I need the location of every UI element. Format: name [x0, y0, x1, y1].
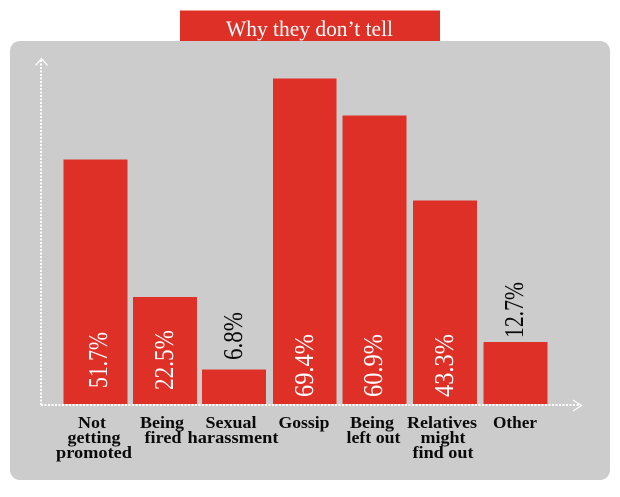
bar: Gossip: [273, 78, 336, 404]
axis: vertical arrow: [36, 58, 48, 405]
bar: Not getting promoted: 51.7%: [83, 332, 113, 388]
bar chart: [36, 58, 582, 411]
label: Relatives might find out: Relatives: [407, 413, 477, 432]
title: [180, 10, 440, 41]
label: Relatives might find out: might: [420, 428, 466, 447]
label: Relatives might find out: find out: [412, 443, 474, 462]
label: Being left out: left out: [346, 428, 401, 447]
bar: Relatives might find out: 43.3%: [429, 334, 459, 397]
label: Gossip: Gossip: [278, 413, 330, 432]
label: Being fired: Being: [140, 413, 185, 432]
label: Not getting promoted: promoted: [56, 443, 133, 462]
axis: horizontal arrow: [41, 400, 582, 411]
label: Other: Other: [493, 413, 537, 432]
bar: Other: [484, 282, 548, 404]
label: Not getting promoted: Not: [78, 413, 106, 432]
label: Sexual harassment: harassment: [188, 428, 279, 447]
bar: Other: 12.7%: [499, 282, 529, 338]
bar: Not getting promoted: [64, 160, 128, 404]
label: Not getting promoted: getting: [68, 428, 121, 447]
bar: Relatives might find out: [413, 200, 477, 404]
label: Being fired: fired: [144, 428, 182, 447]
label: Being left out: [346, 413, 401, 447]
bar: Being left out: 60.9%: [358, 334, 388, 397]
label: Relatives might find out: [407, 413, 477, 462]
label: Being left out: Being: [350, 413, 395, 432]
label: Sexual harassment: [188, 413, 279, 447]
label: Sexual harassment: Sexual: [206, 413, 257, 432]
bar: Being left out: [342, 116, 406, 404]
bar: Sexual harassment: [202, 312, 266, 404]
label: Not getting promoted: [56, 413, 133, 462]
bar: Sexual harassment: 6.8%: [218, 312, 248, 360]
title: Why they don’t tell: [226, 16, 393, 41]
bar: Being fired: 22.5%: [149, 330, 179, 390]
bar: Being fired: [133, 297, 197, 404]
bar: Gossip: 69.4%: [289, 334, 319, 397]
label: Being fired: [140, 413, 185, 447]
